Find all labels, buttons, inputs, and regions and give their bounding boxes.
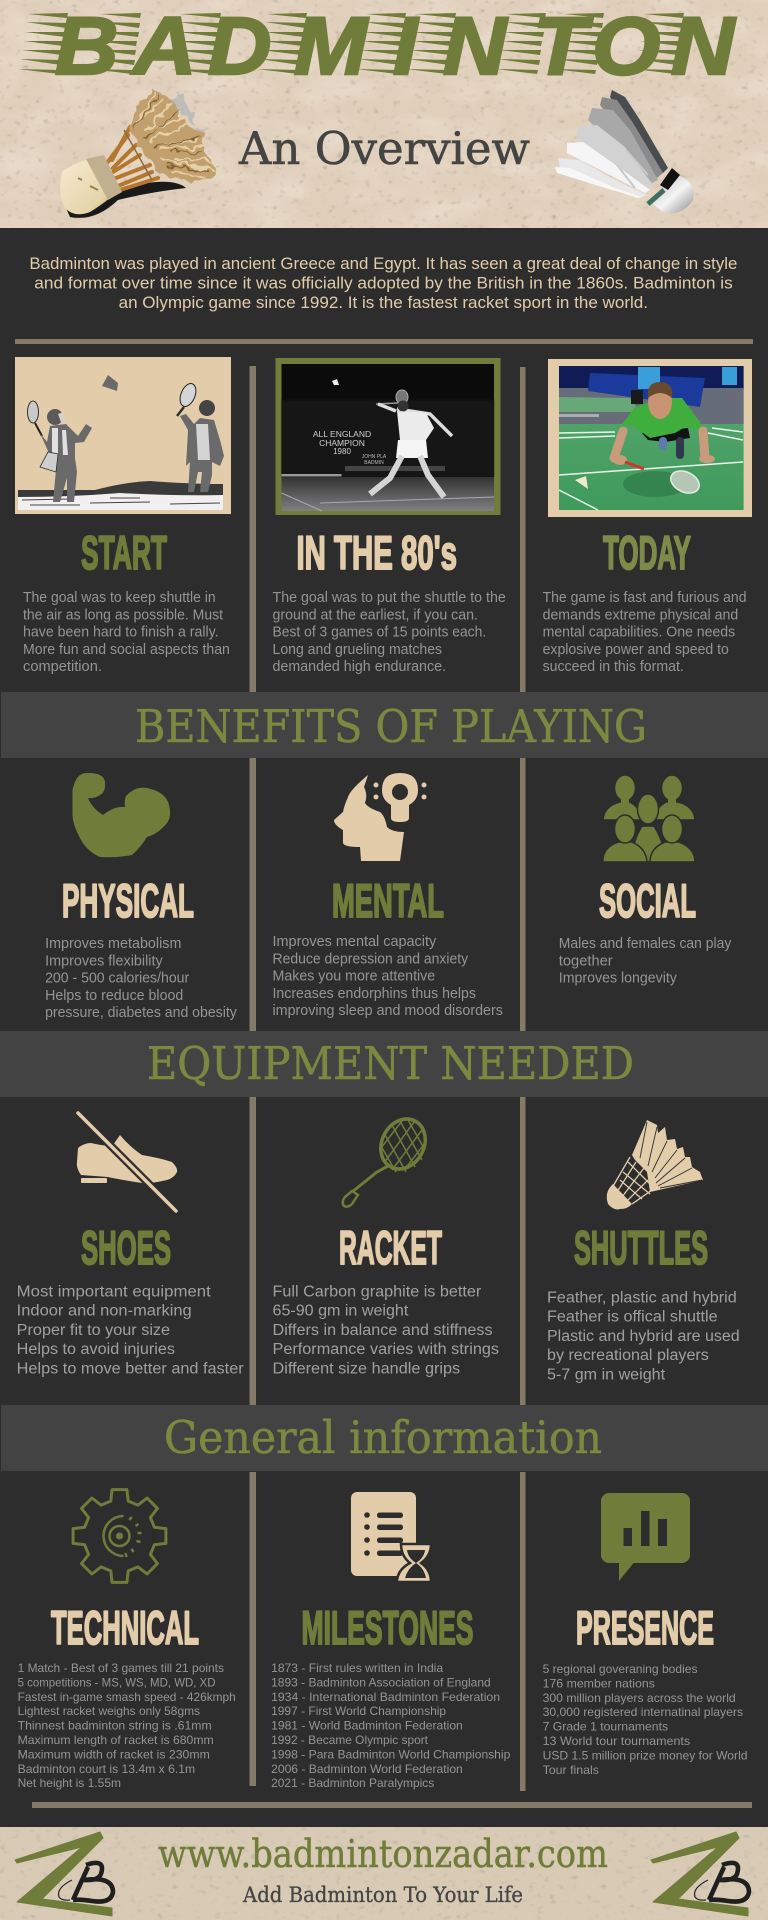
text: milestones timeline: 1998 - Para Badminton World Championship <box>271 1747 511 1761</box>
text: milestones timeline: 2021 - Badminton Paralympics <box>271 1776 434 1790</box>
text: physical benefits: Improves metabolism <box>45 936 181 952</box>
text: social benefits: Males and females can play <box>559 936 732 952</box>
text: racket notes: Differs in balance and stiffness <box>272 1322 493 1339</box>
text: social benefits: Improves longevity <box>559 971 678 987</box>
text: presence facts: USD 1.5 million prize money for World <box>543 1748 747 1762</box>
text: shuttles notes: Feather is offical shuttle <box>547 1309 718 1326</box>
icon: racket <box>343 1111 434 1207</box>
icon: head with light bulb <box>334 773 426 861</box>
icon: flexed muscle <box>72 773 170 857</box>
text: shoes notes: Most important equipment <box>17 1284 212 1300</box>
text: racket notes: Performance varies with strings <box>272 1341 499 1358</box>
image: black and white 1980 champion photo: JOHN PLA <box>362 454 387 460</box>
paper background <box>0 1827 768 1920</box>
heading: MILESTONES: MILESTONES <box>302 1601 474 1654</box>
text: today description: demands extreme physical and <box>543 607 738 623</box>
heading: SHOES: SHOES <box>81 1221 171 1274</box>
text: shoes notes <box>17 1284 244 1377</box>
text: technical facts: Badminton court is 13.4m x 6.1m <box>18 1762 195 1776</box>
text: milestones timeline: 1997 - First World Championship <box>271 1704 446 1718</box>
text: mental benefits: Reduce depression and anxiety <box>272 951 469 967</box>
tagline: Add Badminton To Your Life <box>242 1883 523 1907</box>
logo: ZB left <box>15 1832 113 1916</box>
text: technical facts: Lightest racket weighs only 58gms <box>18 1704 200 1718</box>
text: technical facts: Maximum length of racket is 680mm <box>18 1733 214 1747</box>
text: today description: The game is fast and furious and <box>543 590 746 606</box>
heading: PHYSICAL: PHYSICAL <box>62 874 194 927</box>
image: black and white 1980 champion photo: BADMIN <box>364 460 384 466</box>
icon: chat bubble with bar chart <box>601 1493 690 1581</box>
panel: header <box>0 0 768 228</box>
text: milestones timeline: 1934 - International Badminton Federation <box>271 1690 500 1704</box>
text: physical benefits: pressure, diabetes and obesity <box>45 1005 238 1021</box>
text: technical facts: Thinnest badminton string is .61mm <box>18 1719 212 1733</box>
text: technical facts: 5 competitions - MS, WS, MD, WD, XD <box>18 1675 216 1689</box>
heading: TODAY: TODAY <box>603 526 691 579</box>
section banner: benefits of playing <box>1 692 768 758</box>
text: 80s description: Long and grueling matches <box>272 642 442 658</box>
text: shuttles notes: Feather, plastic and hybrid <box>547 1290 737 1306</box>
text: milestones timeline: 1992 - Became Olympic sport <box>271 1733 429 1747</box>
text: presence facts: Tour finals <box>543 1763 599 1777</box>
text: start description: the air as long as possible. Must <box>23 607 223 623</box>
text: today description: mental capabilities. One needs <box>543 625 735 641</box>
image: black and white 1980 champion photo: CHAMPION <box>319 438 365 448</box>
section banner: equipment needed: EQUIPMENT NEEDED <box>147 1037 634 1090</box>
text: 80s description: demanded high endurance. <box>272 659 446 675</box>
text: shoes notes: Helps to move better and faster <box>17 1360 244 1377</box>
text: 80s description: Best of 3 games of 15 points each. <box>272 625 486 641</box>
text: social benefits <box>559 936 732 987</box>
text: shuttles notes: by recreational players <box>547 1347 709 1364</box>
text: presence facts: 13 World tour tournaments <box>543 1734 690 1748</box>
intro paragraph: Badminton was played in ancient Greece and Egypt. It has seen a great deal of change in style <box>29 254 737 273</box>
text: technical facts: 1 Match - Best of 3 games till 21 points <box>18 1661 224 1675</box>
heading: TECHNICAL: TECHNICAL <box>51 1601 199 1654</box>
icon: checklist with hourglass <box>351 1492 431 1582</box>
panel: today <box>543 359 752 675</box>
icon: group of people <box>603 775 695 862</box>
text: mental benefits: improving sleep and mood disorders <box>272 1003 503 1019</box>
text: physical benefits: 200 - 500 calories/hour <box>45 971 189 987</box>
text: presence facts: 5 regional goveraning bodies <box>543 1662 698 1676</box>
heading: MENTAL: MENTAL <box>332 874 444 927</box>
text: technical facts: Fastest in-game smash speed - 426kmph <box>18 1690 236 1704</box>
heading: START: START <box>81 526 167 579</box>
section banner: general information <box>1 1405 768 1471</box>
image: modern player diving on green court <box>548 359 752 517</box>
image: black and white 1980 champion photo: 1980 <box>333 447 351 456</box>
intro paragraph <box>29 254 737 312</box>
text: technical facts: Net height is 1.55m <box>18 1776 121 1790</box>
text: shoes notes: Proper fit to your size <box>17 1322 170 1339</box>
section banner: equipment needed <box>0 1031 768 1097</box>
text: 80s description <box>272 590 506 675</box>
text: start description: competition. <box>23 659 102 675</box>
photo: antique feather shuttlecock <box>60 88 220 218</box>
panel: mental <box>272 773 503 1019</box>
text: racket notes <box>272 1284 499 1377</box>
panel: shuttles <box>547 1120 740 1383</box>
panel: milestones <box>271 1492 511 1790</box>
panel: start <box>15 357 231 675</box>
section banner: benefits of playing: BENEFITS OF PLAYING <box>135 700 647 753</box>
text: start description: The goal was to keep shuttle in <box>23 590 216 606</box>
text: milestones timeline: 2006 - Badminton World Federation <box>271 1762 463 1776</box>
heading: IN THE 80's: IN THE 80's <box>296 526 457 579</box>
text: start description <box>23 590 230 675</box>
text: racket notes: Different size handle grips <box>272 1360 460 1377</box>
heading: RACKET: RACKET <box>339 1221 442 1274</box>
text: physical benefits: Improves flexibility <box>45 953 163 969</box>
text: social benefits: together <box>559 953 613 969</box>
text: milestones timeline: 1981 - World Badminton Federation <box>271 1719 463 1733</box>
text: presence facts: 30,000 registered internatinal players <box>543 1705 743 1719</box>
text: mental benefits: Improves mental capacity <box>272 934 437 950</box>
text: racket notes: Full Carbon graphite is better <box>272 1284 481 1300</box>
text: technical facts <box>18 1661 236 1790</box>
text: 80s description: The goal was to put the shuttle to the <box>272 590 506 606</box>
text: mental benefits <box>272 934 503 1019</box>
text: start description: have been hard to finish a rally. <box>23 625 219 641</box>
text: shuttles notes: 5-7 gm in weight <box>547 1366 666 1383</box>
text: presence facts <box>543 1662 747 1777</box>
paper background <box>0 0 768 228</box>
text: shoes notes: Helps to avoid injuries <box>17 1341 175 1358</box>
text: mental benefits: Makes you more attentive <box>272 969 435 985</box>
text: today description <box>543 590 746 675</box>
text: today description: explosive power and speed to <box>543 642 729 658</box>
panel: shoes <box>17 1113 244 1377</box>
icon: shuttlecock <box>607 1120 703 1209</box>
text: 80s description: ground at the earliest, if you can. <box>272 607 478 623</box>
intro paragraph: an Olympic game since 1992. It is the fastest racket sport in the world. <box>119 293 648 312</box>
text: racket notes: 65-90 gm in weight <box>272 1303 409 1320</box>
text: shuttles notes <box>547 1290 740 1383</box>
text: presence facts: 7 Grade 1 tournaments <box>543 1720 668 1734</box>
photo: modern white shuttlecock <box>555 90 694 213</box>
image: black and white 1980 champion photo <box>276 358 500 515</box>
panel: technical <box>18 1490 236 1790</box>
text: physical benefits: Helps to reduce blood <box>45 988 183 1004</box>
section banner: general information: General information <box>164 1411 602 1464</box>
panel: in the 80s <box>272 358 506 675</box>
logo: ZB right <box>651 1832 749 1916</box>
text: milestones timeline <box>271 1661 511 1790</box>
image: black and white 1980 champion photo: ALL ENGLAND <box>313 429 371 439</box>
text: shoes notes: Indoor and non-marking <box>17 1303 192 1320</box>
panel: physical <box>45 773 238 1021</box>
panel: social <box>559 775 732 987</box>
text: technical facts: Maximum width of racket is 230mm <box>18 1747 210 1761</box>
text: milestones timeline: 1893 - Badminton Association of England <box>271 1675 491 1689</box>
text: today description: succeed in this format. <box>543 659 684 675</box>
icon: gear <box>73 1490 166 1582</box>
subtitle: An Overview: An Overview <box>238 122 530 175</box>
panel: presence <box>543 1493 747 1777</box>
text: presence facts: 300 million players across the world <box>543 1691 736 1705</box>
intro paragraph: and format over time since it was officially adopted by the British in the 1860s. Badminton is <box>34 274 733 292</box>
panel: footer <box>0 1827 768 1920</box>
panel: racket <box>272 1111 499 1377</box>
website URL: www.badmintonzadar.com <box>158 1832 608 1876</box>
text: physical benefits <box>45 936 238 1021</box>
title: BADMINTON with speed lines: BADMINTON <box>55 0 736 91</box>
text: shuttles notes: Plastic and hybrid are used <box>547 1328 740 1345</box>
text: mental benefits: Increases endorphins thus helps <box>272 986 476 1002</box>
text: milestones timeline: 1873 - First rules written in India <box>271 1661 443 1675</box>
icon: crossed-out shoe <box>77 1113 177 1211</box>
image: period engraving of players <box>15 357 231 514</box>
text: presence facts: 176 member nations <box>543 1676 655 1690</box>
text: start description: More fun and social aspects than <box>23 642 230 658</box>
